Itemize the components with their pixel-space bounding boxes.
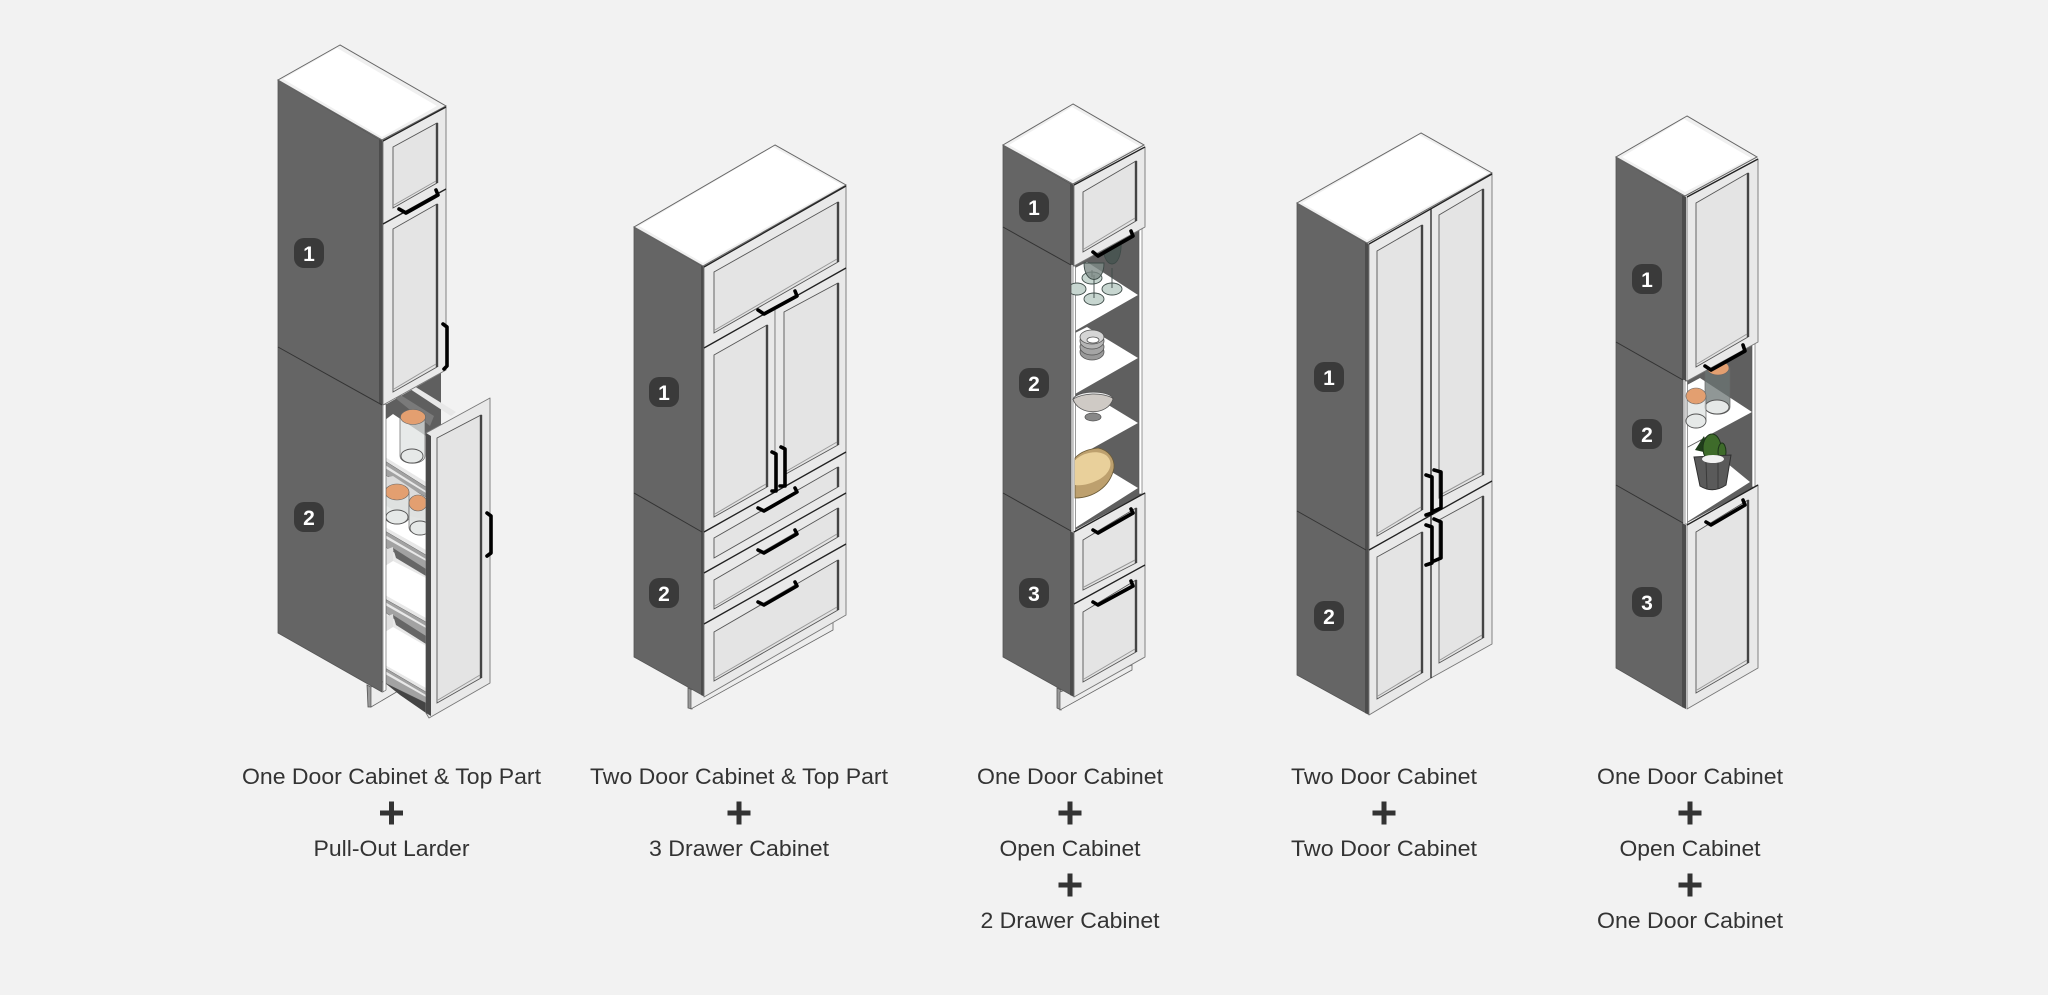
side panel xyxy=(1297,203,1366,713)
badge 2: 2 xyxy=(303,507,315,530)
top xyxy=(278,45,446,140)
caption: column 1 xyxy=(242,764,541,861)
cabinet 4: two door over two door xyxy=(1297,133,1492,715)
caption: column 4 xyxy=(1291,764,1477,861)
caption: column 4: Two Door Cabinet xyxy=(1291,764,1477,789)
joint line xyxy=(1297,511,1366,550)
wooden bowl xyxy=(1075,448,1114,498)
plinth xyxy=(1057,665,1132,710)
upper left door xyxy=(1369,209,1431,550)
upper door xyxy=(1687,159,1758,381)
lower left door xyxy=(1369,515,1431,715)
cabinet 3: one door, open shelves and two drawers xyxy=(1003,104,1145,710)
pull-out door xyxy=(426,398,490,718)
plinth xyxy=(367,672,405,707)
caption: column 5: Open Cabinet xyxy=(1620,836,1760,861)
drawer 1 xyxy=(1074,493,1145,604)
badge 1 xyxy=(1632,264,1662,294)
badge 2 xyxy=(294,502,324,532)
badge 2: 2 xyxy=(1028,373,1040,396)
drawer 1 xyxy=(704,452,846,573)
side panel xyxy=(1616,157,1683,707)
badge 2: 2 xyxy=(1641,424,1653,447)
open back xyxy=(1685,342,1755,524)
upper right door xyxy=(1431,174,1492,515)
badge 3 xyxy=(1019,578,1049,608)
top door xyxy=(1074,147,1145,266)
caption: column 2: 3 Drawer Cabinet xyxy=(649,836,829,861)
caption: column 2 xyxy=(590,764,888,861)
side edge xyxy=(1365,242,1369,715)
badge 3: 3 xyxy=(1028,583,1040,606)
wide bowl xyxy=(1073,392,1113,421)
lower door xyxy=(1687,485,1758,709)
side edge xyxy=(1682,195,1686,709)
door joints xyxy=(1074,147,1145,604)
caption: column 1: Pull-Out Larder xyxy=(314,836,470,861)
top part door xyxy=(383,107,446,224)
badge 1: 1 xyxy=(303,243,315,266)
caption: column 2: Two Door Cabinet & Top Part xyxy=(590,764,888,789)
top door xyxy=(704,186,846,348)
door joints xyxy=(1369,174,1492,678)
caption: column 1: One Door Cabinet & Top Part xyxy=(242,764,541,789)
badge 1 xyxy=(1314,362,1344,392)
lower handle xyxy=(1706,500,1745,525)
caption: column 4: Two Door Cabinet xyxy=(1291,836,1477,861)
drawer 2 xyxy=(1074,565,1145,697)
badge 1 xyxy=(649,377,679,407)
badge 3 xyxy=(1632,587,1662,617)
side panel xyxy=(634,227,702,695)
side edge xyxy=(379,139,383,405)
drawer handles xyxy=(1093,509,1133,605)
badge 2: 2 xyxy=(1323,606,1335,629)
badge 2: 2 xyxy=(658,583,670,606)
upper handle xyxy=(1705,345,1745,370)
handles xyxy=(758,291,797,605)
door handle xyxy=(443,324,447,369)
upper door xyxy=(383,189,446,405)
posts xyxy=(1073,228,1142,532)
badge 1 xyxy=(1019,192,1049,222)
jars xyxy=(1686,361,1730,428)
side panel xyxy=(1003,145,1071,695)
handles xyxy=(1426,470,1441,565)
cabinet 2: two door cabinet with top part and drawers xyxy=(634,145,846,709)
side edge xyxy=(1070,183,1074,697)
caption: column 3: One Door Cabinet xyxy=(977,764,1163,789)
joint line xyxy=(278,347,382,405)
top xyxy=(1616,116,1757,196)
top xyxy=(1297,133,1492,243)
cactus pot xyxy=(1694,434,1731,490)
badge 2 xyxy=(649,578,679,608)
jars pair xyxy=(385,484,430,535)
shelves xyxy=(1075,262,1138,528)
caption: column 5: One Door Cabinet xyxy=(1597,764,1783,789)
right door xyxy=(775,268,846,492)
badge 1: 1 xyxy=(658,382,670,405)
left door xyxy=(704,308,775,532)
wine glasses xyxy=(1068,240,1122,305)
badge 1 xyxy=(294,238,324,268)
handle xyxy=(399,190,438,213)
badge 1: 1 xyxy=(1323,367,1335,390)
badge 1: 1 xyxy=(1641,269,1653,292)
caption: column 5 xyxy=(1597,764,1783,933)
stacked bowls xyxy=(1080,330,1104,360)
joint lines xyxy=(1616,342,1683,523)
door joints xyxy=(383,107,446,224)
badge 2 xyxy=(1019,368,1049,398)
pull-out interior xyxy=(385,373,456,713)
posts xyxy=(1685,344,1755,524)
plinth xyxy=(688,622,833,709)
caption: column 3: 2 Drawer Cabinet xyxy=(980,908,1160,933)
top handle xyxy=(1093,231,1133,256)
joint line xyxy=(634,493,702,532)
side panel xyxy=(278,80,382,692)
side edge xyxy=(701,265,705,697)
badge 2 xyxy=(1632,419,1662,449)
top xyxy=(1003,104,1144,184)
drawer 2 xyxy=(704,493,846,624)
door joints xyxy=(1687,159,1758,525)
badge 3: 3 xyxy=(1641,592,1653,615)
open back xyxy=(1073,228,1141,531)
door joints xyxy=(704,186,846,624)
drawer 3 xyxy=(704,544,846,697)
shelves xyxy=(1687,378,1752,522)
side post xyxy=(383,404,386,692)
badge 1: 1 xyxy=(1028,197,1040,220)
cabinet 1: one door cabinet with top part and pull-out larder xyxy=(278,45,491,718)
caption: column 3 xyxy=(977,764,1163,933)
jar xyxy=(400,410,426,463)
caption: column 5: One Door Cabinet xyxy=(1597,908,1783,933)
badge 2 xyxy=(1314,601,1344,631)
cabinet 5: one door, open shelves and one door xyxy=(1616,116,1758,709)
joint lines xyxy=(1003,227,1071,531)
top xyxy=(634,145,846,266)
lower right door xyxy=(1431,481,1492,678)
pull-out handle xyxy=(487,513,491,556)
caption: column 3: Open Cabinet xyxy=(1000,836,1140,861)
